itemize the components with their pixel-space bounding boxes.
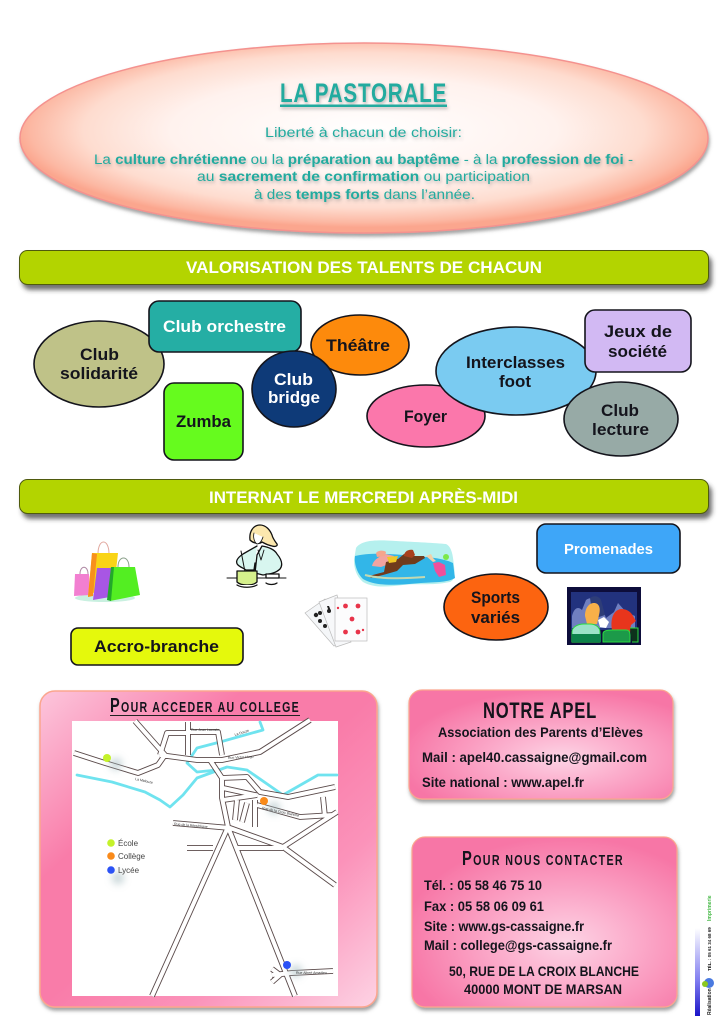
icon: shopping bags [74, 542, 140, 602]
bubble: Club solidarité: solidarité [60, 365, 138, 383]
panel: Pour nous contacter: 40000 MONT DE MARSAN [464, 981, 622, 997]
map: legend: Lycée [118, 866, 140, 875]
panel: Notre APEL: Association des Parents d’Elèves [438, 724, 643, 740]
panel: Pour nous contacter: Fax : 05 58 06 09 61 [424, 898, 544, 914]
heading bar: Valorisation des talents: VALORISATION DES TALENTS DE CHACUN [186, 259, 542, 277]
panel: Pour nous contacter: Mail : college@gs-cassaigne.fr [424, 937, 612, 953]
map: roads [74, 720, 337, 996]
bubble: Club orchestre: Club orchestre [163, 318, 286, 336]
map: street and river labels: La Douze [234, 729, 250, 737]
bubble: Club bridge: Club [274, 371, 313, 389]
panel: Pour nous contacter: 50, RUE DE LA CROIX BLANCHE [449, 963, 639, 979]
icon: playing cards [305, 595, 367, 647]
printer credit strip: Imprimerie [707, 895, 713, 921]
map: street and river labels: Rue de la Croix Blanche [262, 806, 300, 818]
bubble: Théâtre [311, 315, 409, 375]
button: Accro-branche: Accro-branche [94, 638, 219, 656]
bubble: Sports variés: variés [471, 609, 520, 627]
bubble: Club bridge [252, 351, 336, 427]
map [72, 720, 338, 996]
bubble: Club bridge: bridge [268, 389, 320, 407]
bubble: Sports variés [444, 574, 548, 640]
bubble: Foyer: Foyer [404, 408, 448, 426]
title: La Pastorale: LA PASTORALE [280, 78, 447, 108]
icon: swimmers [354, 540, 455, 587]
bubble: Théâtre: Théâtre [326, 337, 390, 355]
text: pastorale description: La culture chrétienne ou la préparation au baptême - à la profession de foi - [94, 152, 633, 167]
panel: Pour nous contacter: Site : www.gs-cassaigne.fr [424, 918, 584, 934]
bubble: Zumba: Zumba [176, 413, 232, 431]
panel: La Pastorale ellipse [20, 43, 708, 233]
panel: Pour nous contacter: Tél. : 05 58 46 75 10 [424, 877, 542, 893]
heading bar: Internat le mercredi [20, 480, 708, 514]
club bubbles [34, 301, 691, 460]
button: Promenades: Promenades [564, 542, 653, 558]
panel: Pour nous contacter: POUR NOUS CONTACTER [462, 848, 624, 870]
button: Promenades [537, 524, 680, 573]
bubble: Jeux de société [585, 310, 691, 372]
map: street and river labels [135, 728, 327, 975]
map: legend [107, 839, 146, 875]
bubble: Club orchestre [149, 301, 301, 352]
printer credit strip: Réalisation [707, 988, 713, 1015]
panel: Notre APEL: NOTRE APEL [483, 698, 597, 723]
bubble: Interclasses foot [436, 327, 596, 415]
map: street and river labels: Rue Victor Hugo [228, 755, 254, 760]
map: street and river labels: Rue de la République [174, 822, 208, 829]
heading bar: Valorisation des talents [20, 250, 708, 284]
bubble: Foyer [367, 385, 485, 447]
bubble: Club lecture [564, 382, 678, 456]
text: pastorale description [94, 125, 633, 202]
printer credit strip: TÉL. : 05 61 34 68 69 [705, 927, 712, 971]
printer credit strip [695, 895, 714, 1016]
bubble: Club solidarité [34, 321, 164, 407]
bubble: Zumba [164, 383, 243, 460]
bubble: Interclasses foot: Interclasses [466, 354, 565, 372]
heading: Pour accéder au collège: POUR ACCEDER AU COLLEGE [110, 695, 300, 717]
panel: Notre APEL: Site national : www.apel.fr [422, 774, 585, 790]
map: street and river labels: La Midouze [135, 777, 153, 785]
text: pastorale description: au sacrement de confirmation ou participation [197, 169, 530, 184]
text: pastorale description: à des temps forts dans l’année. [254, 187, 475, 202]
map: legend: Collège [118, 852, 146, 861]
map: legend: École [118, 839, 139, 848]
bubble: Jeux de société: société [608, 343, 667, 361]
bubble: Club solidarité: Club [80, 346, 119, 364]
map: location markers [103, 754, 302, 977]
bubble: Club lecture: Club [601, 402, 639, 420]
bubble: Interclasses foot: foot [499, 373, 532, 391]
panel: Pour nous contacter [412, 837, 677, 1007]
bubble: Club lecture: lecture [592, 421, 649, 439]
text: pastorale description: Liberté à chacun de choisir: [265, 125, 462, 140]
panel: Notre APEL: Mail : apel40.cassaigne@gmail.com [422, 749, 647, 765]
panel: Notre APEL [409, 690, 673, 799]
icon: person cooking [227, 525, 286, 587]
icon: cinema [567, 587, 641, 645]
bubble: Jeux de société: Jeux de [604, 323, 672, 341]
map: street and river labels: Rue Albert Amadieu [296, 971, 327, 975]
button: Accro-branche [71, 628, 243, 665]
panel: Pour accéder au collège [40, 691, 377, 1007]
map: street and river labels: Rue Jean Lacoste [191, 728, 219, 732]
heading bar: Internat le mercredi: INTERNAT LE MERCREDI APRÈS-MIDI [209, 488, 518, 507]
bubble: Sports variés: Sports [471, 589, 520, 607]
map: rivers [77, 722, 337, 807]
